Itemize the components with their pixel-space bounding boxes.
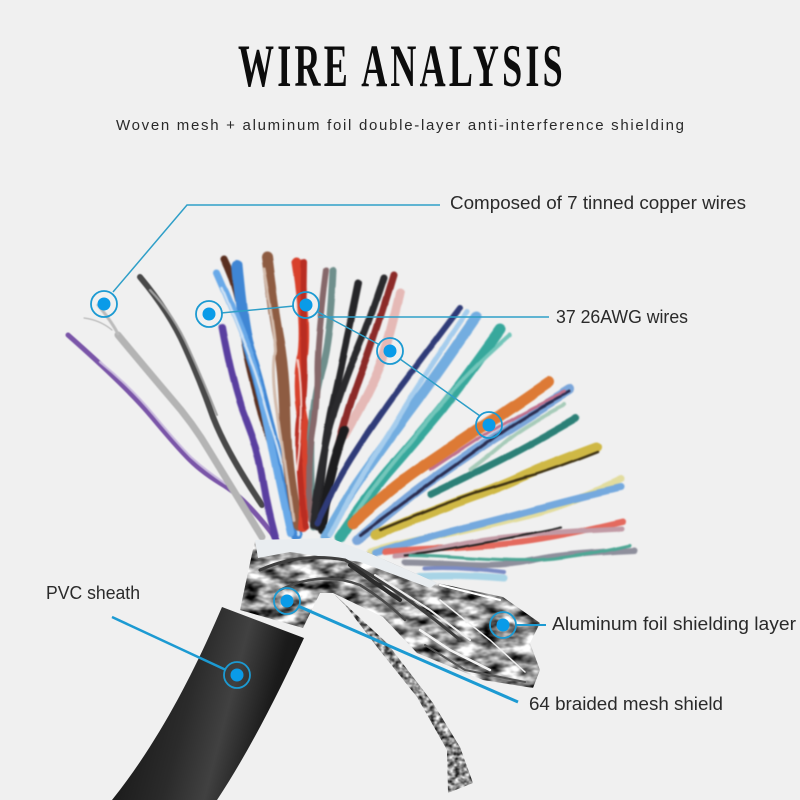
label: braided mesh: 64 braided mesh shield (529, 694, 723, 714)
label: tinned copper wires: Composed of 7 tinned copper wires (450, 193, 746, 213)
subtitle: Woven mesh + aluminum foil double-layer anti-interference shielding (116, 117, 684, 134)
callout: foil leader line (516, 624, 546, 626)
marker: wire 1 (196, 301, 222, 327)
callout: braided mesh leader line (298, 606, 518, 702)
callout: 37 26AWG wires leader lines (221, 306, 549, 416)
marker: tinned copper wires (91, 291, 117, 317)
marker: braided mesh (274, 588, 300, 614)
cable photo illustration (68, 258, 635, 800)
marker: aluminum foil (490, 612, 516, 638)
label: aluminum foil: Aluminum foil shielding layer (552, 614, 796, 634)
callout: tinned copper wires leader line (113, 205, 440, 292)
braided mesh tail (333, 593, 473, 793)
aluminum foil and braid bundle (240, 538, 540, 688)
marker: wire 4 (476, 412, 502, 438)
label: PVC sheath: PVC sheath (46, 583, 140, 603)
wires: left fan (68, 277, 277, 540)
black PVC sheath (112, 607, 304, 800)
callout: PVC sheath leader line (112, 617, 226, 670)
marker: wire 2 (293, 292, 319, 318)
marker: PVC sheath (224, 662, 250, 688)
marker: wire 3 (377, 338, 403, 364)
wires: centre fan (217, 258, 400, 537)
label: 26AWG wires: 37 26AWG wires (556, 307, 688, 327)
title: WIRE ANALYSIS (238, 33, 563, 99)
wires: right fan (317, 308, 635, 578)
